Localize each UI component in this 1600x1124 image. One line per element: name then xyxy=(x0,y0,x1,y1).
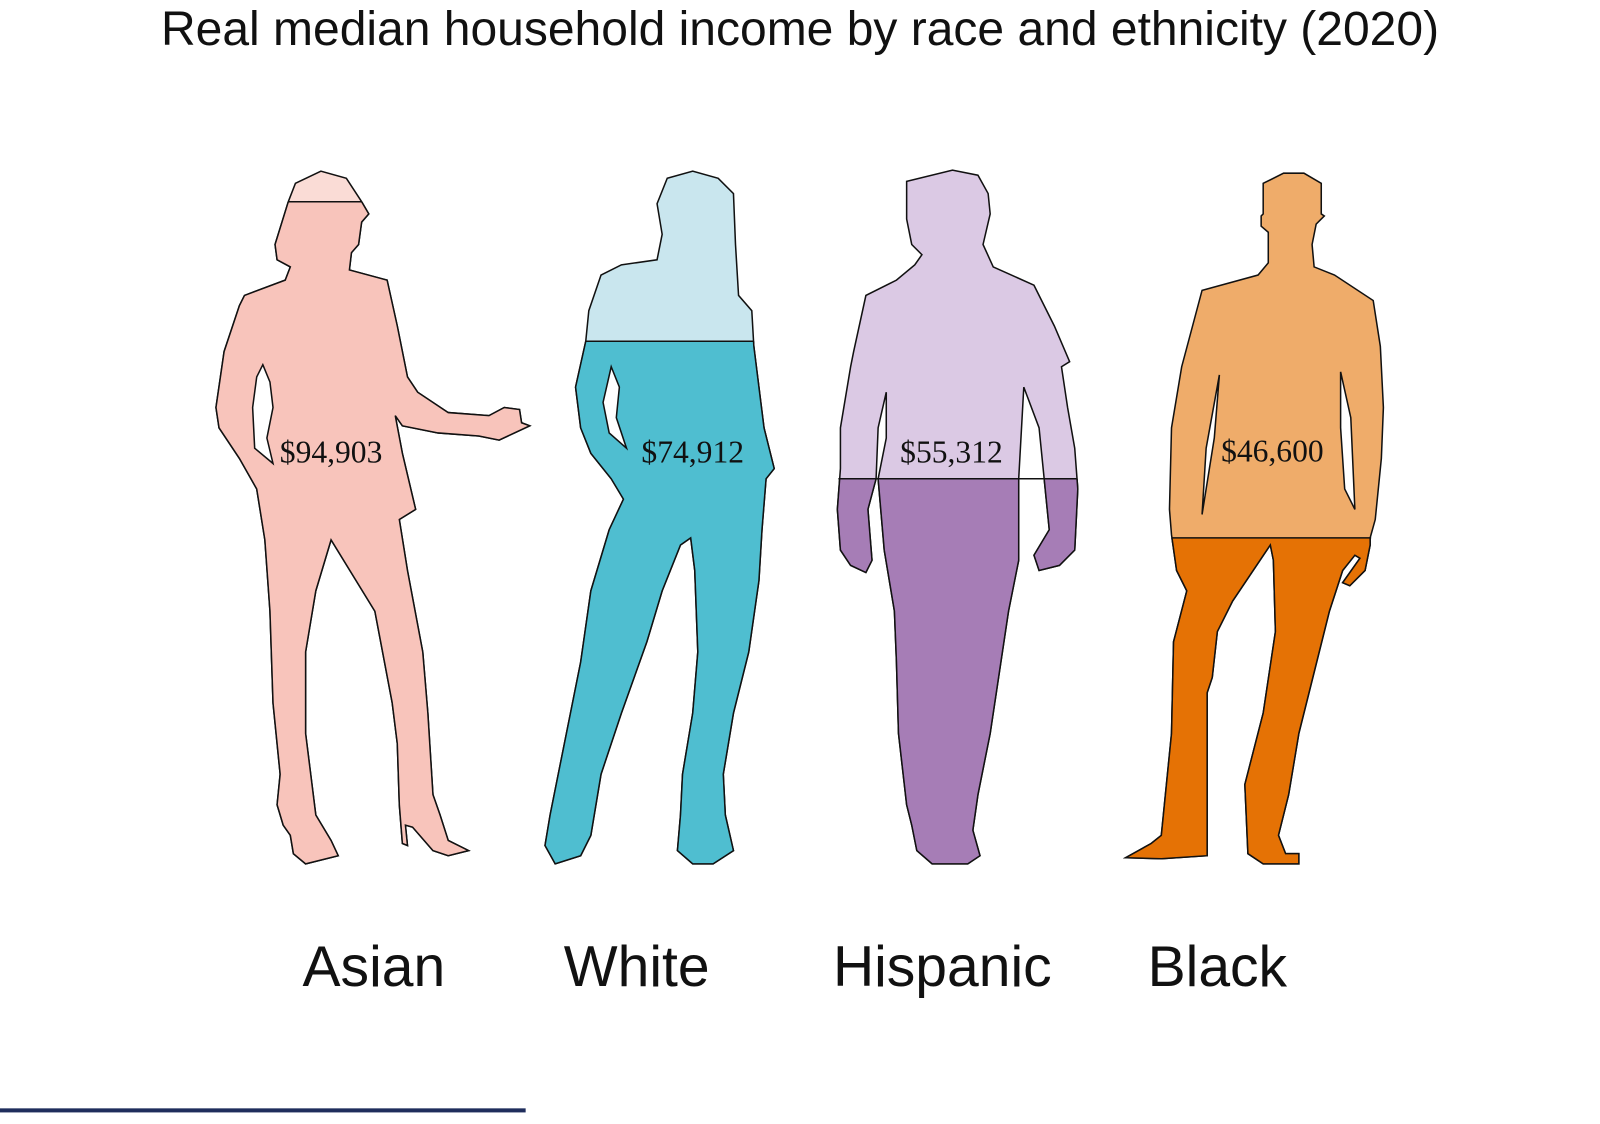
footer rule xyxy=(0,1108,526,1112)
title: Real median household income by race and ethnicity (2020) xyxy=(161,3,1439,56)
category labels: Asian xyxy=(303,935,445,999)
category labels: Hispanic xyxy=(833,935,1052,999)
value labels: $74,912 xyxy=(641,434,744,469)
category labels: White xyxy=(564,935,710,999)
figure: Black xyxy=(1126,173,1383,864)
value labels: $46,600 xyxy=(1221,433,1324,468)
value labels: $94,903 xyxy=(280,434,382,469)
category labels xyxy=(303,935,1288,999)
figure: Hispanic xyxy=(837,170,1078,864)
category labels: Black xyxy=(1148,935,1288,999)
figure: Asian xyxy=(216,171,530,864)
value labels xyxy=(280,433,1324,469)
value labels: $55,312 xyxy=(900,434,1003,469)
chart: silhouettes xyxy=(0,169,1384,1112)
figure: White xyxy=(545,171,774,864)
